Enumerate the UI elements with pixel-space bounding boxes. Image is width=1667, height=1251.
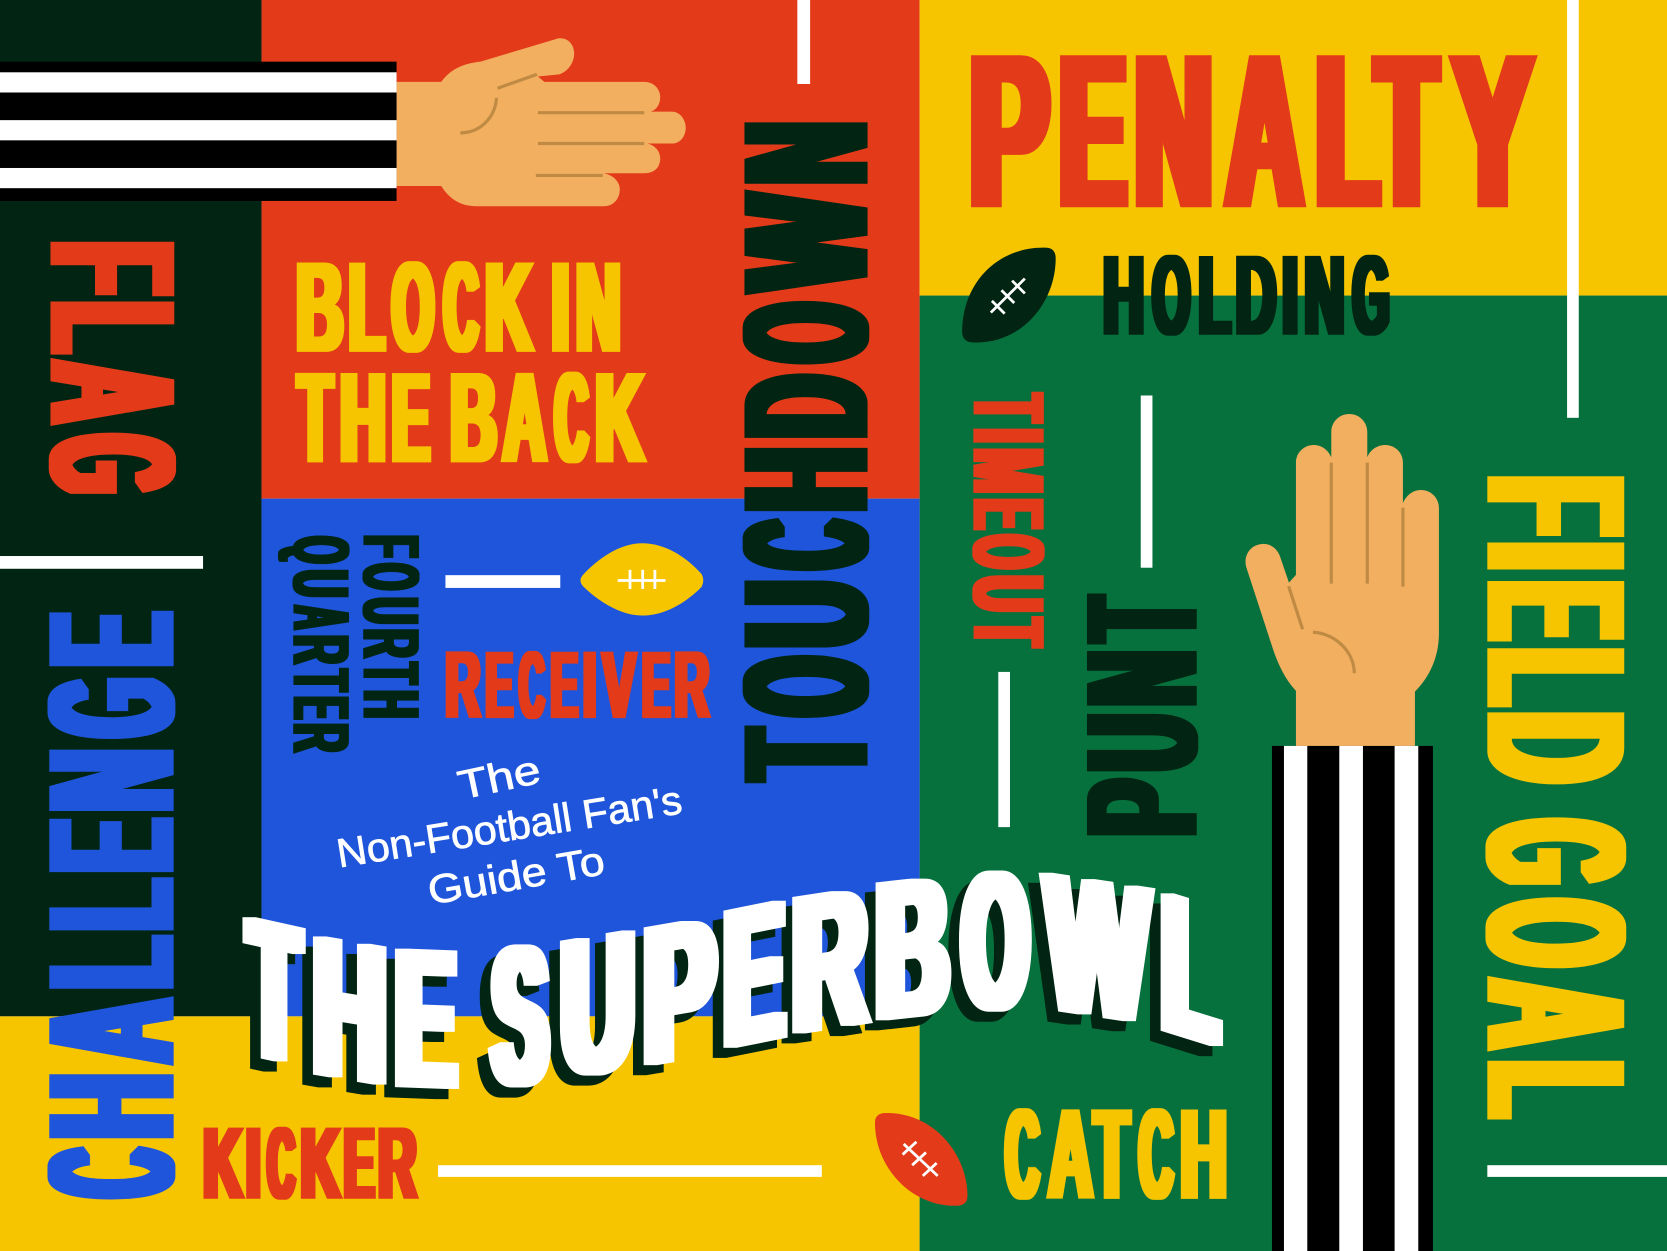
- subtitle: The Non-Football Fan's Guide To: Guide To: [424, 837, 608, 914]
- word: KICKER: K: [203, 1106, 242, 1219]
- word: RECEIVER: E: [551, 632, 578, 738]
- infographic: N: [1304, 232, 1344, 358]
- infographic: T: [1094, 1083, 1129, 1225]
- word: TOUCHDOWN: O: [708, 657, 904, 715]
- word: CHALLENGE: E: [12, 820, 210, 872]
- word: CHALLENGE: L: [12, 938, 210, 989]
- word: BLOCK IN: K: [485, 236, 532, 378]
- icon: yellow football: [580, 543, 703, 616]
- word: THE BACK: B: [450, 346, 497, 489]
- word: BLOCK IN: B: [296, 236, 343, 378]
- infographic: G: [14, 435, 211, 493]
- hand: [1246, 414, 1439, 748]
- infographic: O: [953, 535, 1065, 568]
- infographic: W: [1047, 833, 1149, 1062]
- title: THE SUPERBOWL: R: [793, 847, 866, 1073]
- word: BLOCK IN: C: [444, 236, 478, 378]
- word: FIELD GOAL: F: [1447, 476, 1665, 534]
- word: HOLDING: I: [1282, 232, 1298, 358]
- word: PUNT: [1054, 598, 1229, 836]
- word: FIELD GOAL: I: [1447, 542, 1665, 570]
- infographic: R: [347, 629, 436, 658]
- hand creases: [460, 74, 644, 175]
- subtitle: The Non-Football Fan's Guide To: Non-Football Fan's: [333, 776, 685, 876]
- word: TOUCHDOWN: H: [708, 448, 904, 511]
- title: THE SUPERBOWL: O: [963, 832, 1028, 1049]
- title shadow: THE SUPERBOWL: P: [634, 887, 704, 1115]
- word: CHALLENGE: H: [12, 1074, 210, 1139]
- sleeve: [1272, 746, 1433, 1251]
- infographic: A: [1049, 1083, 1092, 1225]
- word: FIELD GOAL: E: [1447, 581, 1665, 639]
- icon: dark football: [962, 248, 1056, 343]
- infographic: L: [1151, 862, 1208, 1096]
- infographic: E: [12, 613, 210, 666]
- title shadow: THE SUPERBOWL: O: [952, 842, 1017, 1059]
- infographic: A: [14, 362, 211, 422]
- title: THE SUPERBOWL: H: [314, 896, 386, 1125]
- infographic: R: [674, 632, 709, 738]
- title shadow: THE SUPERBOWL: E: [386, 919, 444, 1139]
- infographic: H: [347, 690, 436, 718]
- sleeve stripes: [0, 72, 397, 188]
- infographic: N: [576, 236, 620, 378]
- word: HOLDING: L: [1199, 232, 1231, 358]
- title shadow: THE SUPERBOWL: T: [238, 888, 289, 1115]
- infographic: H: [1181, 1083, 1227, 1225]
- icon: pointing hand with striped sleeve: [0, 38, 686, 206]
- infographic: D: [1236, 232, 1276, 358]
- word: FLAG: F: [14, 242, 211, 294]
- word: TIMEOUT: T: [953, 394, 1065, 421]
- infographic: K: [301, 1106, 340, 1219]
- word: QUARTER: Q: [277, 536, 366, 563]
- word: TOUCHDOWN: U: [708, 580, 904, 647]
- word: CATCH: [1006, 1083, 1227, 1225]
- word: FOURTH: O: [347, 563, 436, 590]
- word: TOUCHDOWN: C: [708, 521, 904, 568]
- title: THE SUPERBOWL: E: [397, 909, 455, 1129]
- title shadow: THE SUPERBOWL: B: [866, 846, 938, 1070]
- infographic: L: [14, 302, 211, 352]
- word: BLOCK IN: L: [349, 236, 384, 378]
- word: PENALTY: P: [970, 10, 1049, 252]
- word: TIMEOUT: M: [953, 448, 1065, 493]
- panel: yellow bottom block: [0, 1016, 920, 1251]
- infographic: E: [642, 632, 670, 738]
- icon: red football: [875, 1113, 967, 1206]
- panel: blue block: [262, 499, 920, 1016]
- title shadow: THE SUPERBOWL: R: [782, 857, 856, 1083]
- infographic: A: [503, 346, 546, 489]
- word: THE BACK: T: [298, 346, 332, 489]
- word: HOLDING: H: [1103, 232, 1144, 358]
- infographic: T: [347, 663, 436, 684]
- infographic: R: [277, 723, 366, 752]
- infographic: C: [555, 346, 588, 489]
- word: FIELD GOAL: L: [1447, 648, 1665, 704]
- title shadow: THE SUPERBOWL: U: [551, 900, 623, 1128]
- panel: dark green left column: [0, 0, 262, 1016]
- panel: red block: [262, 0, 920, 499]
- infographic: C: [1139, 1083, 1173, 1225]
- infographic: U: [953, 576, 1065, 612]
- word: PENALTY: E: [1060, 10, 1126, 252]
- word: THE BACK: E: [392, 346, 430, 489]
- infographic: K: [595, 346, 644, 489]
- word: TOUCHDOWN: T: [708, 730, 904, 779]
- word: CHALLENGE: C: [12, 1149, 210, 1197]
- icon: raised hand with striped sleeve: [1246, 414, 1439, 1251]
- title shadow: THE SUPERBOWL: [238, 842, 1208, 1139]
- infographic: G: [12, 679, 210, 737]
- word: BLOCK IN: I: [552, 236, 569, 378]
- subtitle: The Non-Football Fan's Guide To: [333, 746, 685, 914]
- word: HOLDING: O: [1152, 232, 1190, 358]
- word: CHALLENGE: A: [12, 1000, 210, 1062]
- hand: [393, 38, 686, 206]
- title shadow: THE SUPERBOWL: E: [714, 870, 773, 1098]
- infographic: R: [378, 1106, 417, 1219]
- infographic: N: [12, 750, 210, 811]
- title: THE SUPERBOWL: U: [562, 890, 634, 1118]
- panel: green right block: [920, 296, 1667, 1251]
- word: FOURTH: F: [347, 535, 436, 557]
- word: THE BACK: H: [340, 346, 386, 489]
- word: RECEIVER: R: [445, 632, 481, 738]
- word: BLOCK IN: O: [392, 236, 434, 378]
- hand creases: [1289, 463, 1403, 673]
- title shadow: THE SUPERBOWL: S: [482, 915, 536, 1137]
- infographic: U: [1054, 714, 1229, 771]
- word: FLAG: [14, 242, 211, 493]
- word: QUARTER: R: [277, 635, 366, 664]
- word: QUARTER: A: [277, 605, 366, 629]
- word: FOURTH: U: [347, 597, 436, 624]
- word: TIMEOUT: I: [953, 429, 1065, 443]
- word: TIMEOUT: E: [953, 499, 1065, 529]
- panel: yellow top right block: [920, 0, 1667, 296]
- word: PUNT: P: [1054, 780, 1229, 836]
- infographic: E: [344, 1106, 374, 1219]
- infographic: T: [277, 670, 366, 691]
- word: KICKER: I: [246, 1106, 261, 1219]
- word: QUARTER: U: [277, 570, 366, 597]
- sleeve: [0, 62, 397, 201]
- sleeve stripes: [1284, 746, 1418, 1251]
- word: RECEIVER: E: [486, 632, 513, 738]
- infographic: T: [1054, 598, 1229, 640]
- title: THE SUPERBOWL: [249, 832, 1218, 1129]
- infographic: V: [603, 632, 636, 738]
- title: THE SUPERBOWL: P: [644, 876, 715, 1105]
- subtitle: The Non-Football Fan's Guide To: The: [454, 746, 544, 808]
- word: RECEIVER: I: [583, 632, 596, 738]
- title: THE SUPERBOWL: T: [249, 878, 299, 1105]
- title: THE SUPERBOWL: E: [725, 860, 784, 1088]
- infographic: W: [1036, 843, 1138, 1073]
- word: CHALLENGE: L: [12, 880, 210, 930]
- word: CATCH: C: [1006, 1083, 1039, 1225]
- infographic: E: [277, 696, 366, 719]
- title shadow: THE SUPERBOWL: H: [303, 906, 375, 1135]
- word: KICKER: C: [267, 1106, 295, 1219]
- infographic: T: [953, 619, 1065, 646]
- title: THE SUPERBOWL: S: [493, 905, 547, 1127]
- infographic: N: [1054, 651, 1229, 706]
- title: THE SUPERBOWL: B: [877, 836, 948, 1060]
- word: RECEIVER: C: [519, 632, 544, 738]
- infographic: L: [1162, 852, 1218, 1086]
